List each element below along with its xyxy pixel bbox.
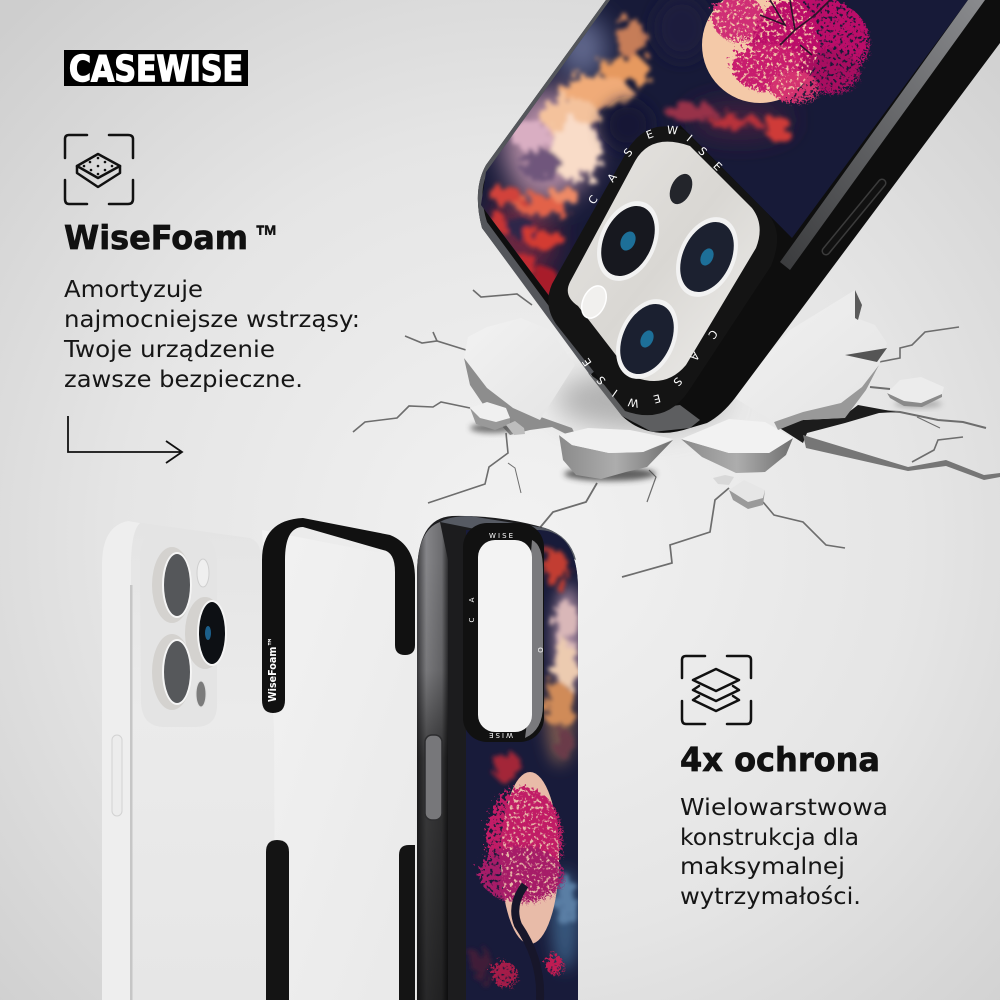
lens 1 — [585, 191, 671, 291]
transparent back panel — [262, 530, 416, 1000]
camera opening — [478, 540, 532, 732]
lens 2 — [197, 600, 227, 666]
ring lettering — [468, 532, 544, 739]
tree foliage — [712, 0, 870, 104]
moon — [501, 772, 559, 944]
moon — [702, 0, 818, 103]
bumper lettering: C — [586, 193, 601, 207]
tree foliage — [480, 788, 564, 988]
white phone back view — [102, 521, 275, 1000]
bumper lettering: A — [687, 349, 702, 364]
icon: stacked layers in frame — [682, 656, 751, 724]
heading: WiseFoam: ™ — [255, 220, 278, 253]
artwork — [470, 0, 980, 310]
ring lettering: WISE — [489, 532, 513, 540]
phone body — [102, 521, 275, 1000]
artwork — [466, 530, 582, 1000]
foam bumper lower left — [266, 840, 289, 1000]
lens 2 — [664, 207, 750, 307]
lens housings — [152, 547, 225, 710]
camera plate — [568, 142, 760, 381]
foam bumper lower right — [399, 845, 415, 1000]
text block: 4x ochrona description: wytrzymałości. — [680, 884, 861, 910]
logo: CASEWISE — [69, 49, 243, 90]
sensor — [665, 170, 697, 208]
side band — [417, 522, 448, 1000]
camera bumper — [548, 126, 777, 415]
lens 1 — [162, 552, 192, 618]
text block: WiseFoam description: najmocniejsze wstrząsy: — [64, 307, 360, 333]
clouds — [487, 18, 792, 294]
chunk: centre-left — [559, 428, 673, 481]
icon: foam sponge in frame — [65, 135, 133, 204]
bumper lettering: I — [610, 387, 620, 399]
crater with broken wall chunks — [464, 290, 1000, 509]
case body — [417, 516, 578, 1000]
text block: WiseFoam description: Amortyzuje — [64, 277, 203, 303]
bumper lettering: E — [710, 159, 725, 174]
chunk: left large — [464, 318, 578, 440]
foam bumper top — [262, 518, 415, 713]
heading: 4x ochrona: 4x ochrona — [680, 740, 880, 779]
chunk: right pebble — [887, 377, 944, 408]
side button — [425, 735, 442, 820]
side button — [826, 183, 882, 251]
soft glow — [546, 585, 582, 970]
bumper lettering: E — [580, 355, 594, 369]
tree trunk — [515, 885, 540, 1000]
bumper lettering: C — [705, 327, 720, 342]
tree branches — [760, 0, 830, 55]
case bottom translucent corner — [588, 373, 700, 432]
text block: 4x ochrona description: konstrukcja dla — [680, 825, 859, 851]
bumper lettering: S — [670, 374, 685, 389]
bumper lettering: S — [594, 373, 609, 387]
crater shadow — [555, 370, 725, 430]
ring lettering: A — [468, 597, 476, 602]
flash — [577, 282, 611, 322]
camera ring — [463, 523, 544, 742]
ring lettering: WISE — [489, 731, 513, 739]
lens 3 — [604, 289, 690, 389]
wall cracks — [353, 290, 986, 577]
chunk: bottom pebbles — [713, 475, 765, 509]
chunk: right crack gap and wedge — [778, 405, 1000, 480]
case body — [478, 0, 1000, 433]
chunk: centre-right — [681, 419, 793, 473]
sensor — [196, 681, 206, 707]
top edge — [440, 516, 576, 560]
flash — [197, 559, 209, 587]
ring lettering: C — [468, 617, 476, 622]
heading: WiseFoam: WiseFoam — [64, 218, 248, 257]
bumper lettering: E — [652, 391, 662, 406]
text block: WiseFoam description — [63, 277, 360, 393]
arrow — [68, 416, 182, 463]
bumper lettering: E — [644, 127, 655, 142]
chunk: left small — [470, 402, 525, 435]
case left translucent edge — [478, 0, 612, 375]
gloss edge — [780, 0, 985, 270]
text block: 4x ochrona description: maksymalnej — [680, 854, 845, 880]
case side view phone — [417, 516, 582, 1000]
chunk: right large — [730, 290, 887, 430]
bumper lettering: A — [605, 171, 620, 185]
text block: WiseFoam description: zawsze bezpieczne. — [64, 367, 303, 393]
text block: WiseFoam description: Twoje urządzenie — [63, 337, 275, 363]
bumper lettering: S — [695, 144, 710, 159]
foam label: WiseFoam™ — [266, 637, 279, 702]
text block: 4x ochrona description: Wielowarstwowa — [680, 795, 888, 821]
bumper lettering: W — [666, 124, 678, 137]
bumper lettering: W — [627, 395, 640, 410]
text block: 4x ochrona description — [680, 795, 888, 910]
clouds — [472, 548, 577, 983]
bumper lettering: S — [621, 146, 636, 160]
top phone in case — [470, 0, 1000, 433]
camera plateau — [140, 528, 217, 727]
bumper lettering — [580, 124, 725, 410]
lens 3 — [162, 639, 192, 705]
ring lettering: O — [536, 647, 544, 653]
bumper lettering: I — [684, 132, 695, 144]
soft sky glow — [486, 16, 790, 282]
phone side strip — [102, 521, 140, 1000]
side button — [112, 735, 122, 816]
